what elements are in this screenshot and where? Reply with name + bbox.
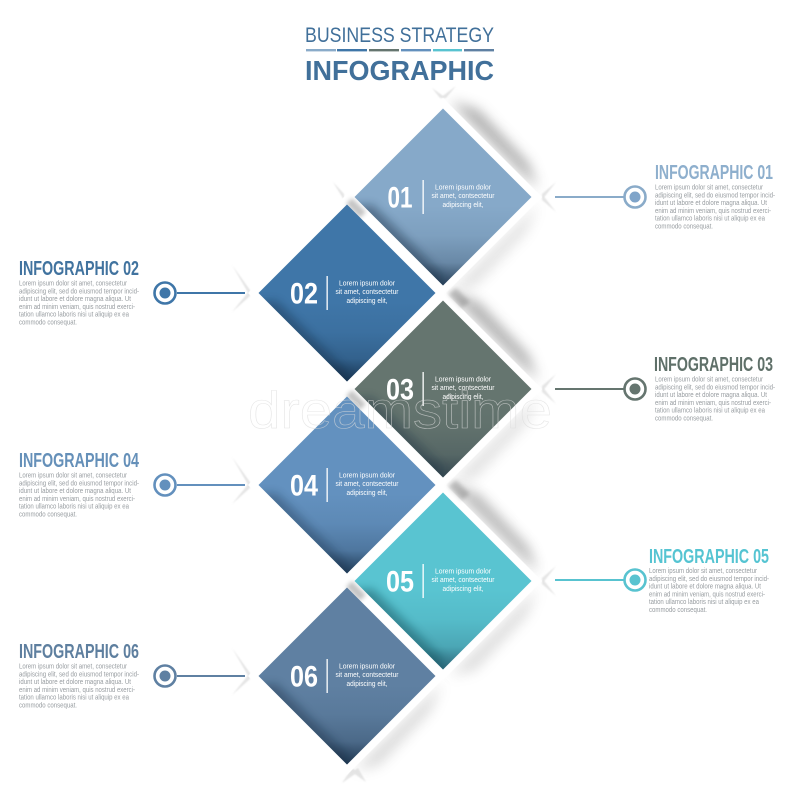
text block 06: idunt ut labore et dolore magna aliqua. Ut [19, 679, 131, 686]
diamond 01: Lorem ipsum dolor [435, 184, 492, 192]
diamond 03: 03 [386, 374, 414, 406]
text block 03: idunt ut labore et dolore magna aliqua. Ut [655, 392, 767, 399]
diamond 02: Lorem ipsum dolor [339, 280, 396, 288]
diamond 02: sit amet, contsectetur [336, 289, 399, 296]
title: INFOGRAPHIC [305, 55, 494, 86]
text block 04: Lorem ipsum dolor sit amet, consectetur [19, 472, 128, 480]
diamond 05: Lorem ipsum dolor [435, 568, 492, 576]
diamond 05 [347, 492, 532, 677]
text block 03: enim ad minim veniam, quis nostrud exerci- [655, 400, 772, 407]
gap shadows between diamonds [346, 198, 470, 601]
text block 05: enim ad minim veniam, quis nostrud exerci- [649, 591, 766, 598]
text block 04: enim ad minim veniam, quis nostrud exerci- [19, 496, 136, 503]
diamond 05: sit amet, contsectetur [432, 577, 495, 584]
diamond 02 [251, 204, 436, 389]
white diamond frames [248, 98, 542, 775]
text block 04: idunt ut labore et dolore magna aliqua. Ut [19, 488, 131, 495]
diamond 05: 05 [386, 566, 414, 598]
corner light streaks [232, 86, 556, 783]
text block 01: tation ullamco laboris nisi ut aliquip ex ea [655, 216, 765, 223]
diamond 04 [251, 396, 436, 581]
text block 06: enim ad minim veniam, quis nostrud exerci- [19, 687, 136, 694]
connector 03 [555, 378, 646, 400]
diamond 04: 04 [290, 470, 318, 502]
connector 05 [555, 570, 646, 590]
text block 02: enim ad minim veniam, quis nostrud exerci- [19, 304, 136, 311]
diamond 01: adipiscing elit, [442, 202, 484, 209]
text block 06: adipiscing elit, sed do eiusmod tempor incid- [19, 671, 140, 678]
text block 02 [19, 258, 140, 326]
text block 05: tation ullamco laboris nisi ut aliquip ex ea [649, 599, 759, 606]
text block 04: adipiscing elit, sed do eiusmod tempor incid- [19, 480, 140, 487]
connector 01 [555, 186, 646, 208]
diamond 03: adipiscing elit, [442, 394, 484, 401]
text block 06: Lorem ipsum dolor sit amet, consectetur [19, 664, 128, 670]
title [305, 24, 494, 86]
text block 03 [654, 354, 776, 422]
text block 01 [655, 162, 776, 230]
text block 06: INFOGRAPHIC 06 [19, 641, 139, 663]
diamond 02: 02 [290, 278, 318, 310]
text block 03: commodo consequat. [655, 416, 713, 422]
text block 05 [649, 546, 770, 614]
text block 02: adipiscing elit, sed do eiusmod tempor incid- [19, 288, 140, 295]
diamond 06 [251, 588, 436, 772]
text block 05: commodo consequat. [649, 607, 707, 614]
diamond 03: Lorem ipsum dolor [435, 376, 492, 384]
text block 03: adipiscing elit, sed do eiusmod tempor incid- [655, 384, 776, 391]
text block 02: Lorem ipsum dolor sit amet, consectetur [19, 280, 128, 288]
diamond 01 [347, 108, 532, 293]
diamond 04: sit amet, contsectetur [336, 481, 399, 488]
text block 02: commodo consequat. [19, 320, 77, 326]
text block 01: commodo consequat. [655, 224, 713, 230]
watermark: dreamstime [248, 382, 552, 440]
text block 01: Lorem ipsum dolor sit amet, consectetur [655, 184, 764, 192]
text block 04: commodo consequat. [19, 512, 77, 518]
text block 04: INFOGRAPHIC 04 [19, 450, 140, 472]
diamond 01: sit amet, contsectetur [432, 193, 495, 200]
text block 05: idunt ut labore et dolore magna aliqua. Ut [649, 584, 761, 591]
text block 01: adipiscing elit, sed do eiusmod tempor incid- [655, 192, 776, 199]
text block 06 [19, 641, 140, 710]
diamond 06: adipiscing elit, [346, 681, 388, 688]
title colour bars [306, 49, 494, 51]
diamond 03: sit amet, contsectetur [432, 385, 495, 392]
text block 01: idunt ut labore et dolore magna aliqua. Ut [655, 200, 767, 207]
text block 01: enim ad minim veniam, quis nostrud exerci- [655, 208, 772, 215]
text block 02: INFOGRAPHIC 02 [19, 258, 139, 280]
text block 06: commodo consequat. [19, 702, 77, 710]
connector 02 [154, 282, 245, 304]
text block 02: idunt ut labore et dolore magna aliqua. Ut [19, 296, 131, 303]
diamond 06: sit amet, contsectetur [336, 672, 399, 679]
text block 02: tation ullamco laboris nisi ut aliquip ex ea [19, 312, 129, 319]
diamond 04: adipiscing elit, [346, 490, 388, 497]
title: BUSINESS STRATEGY [305, 24, 494, 47]
text block 03: tation ullamco laboris nisi ut aliquip ex ea [655, 408, 765, 415]
diamond 02: adipiscing elit, [346, 298, 388, 305]
diamond 04: Lorem ipsum dolor [339, 472, 396, 480]
connector 06 [154, 666, 245, 686]
text block 05: adipiscing elit, sed do eiusmod tempor incid- [649, 576, 770, 583]
connector 04 [154, 474, 245, 496]
text block 05: Lorem ipsum dolor sit amet, consectetur [649, 568, 758, 575]
text block 04 [19, 450, 140, 518]
text block 04: tation ullamco laboris nisi ut aliquip ex ea [19, 504, 129, 511]
diamond 01: 01 [388, 182, 412, 214]
drop shadows behind diamonds [354, 101, 538, 771]
diamond 06: Lorem ipsum dolor [339, 664, 396, 670]
diamond 06: 06 [290, 660, 318, 694]
diamond 03 [347, 300, 532, 485]
text block 06: tation ullamco laboris nisi ut aliquip ex ea [19, 695, 129, 702]
diamond 05: adipiscing elit, [442, 586, 484, 593]
text block 03: Lorem ipsum dolor sit amet, consectetur [655, 376, 764, 384]
